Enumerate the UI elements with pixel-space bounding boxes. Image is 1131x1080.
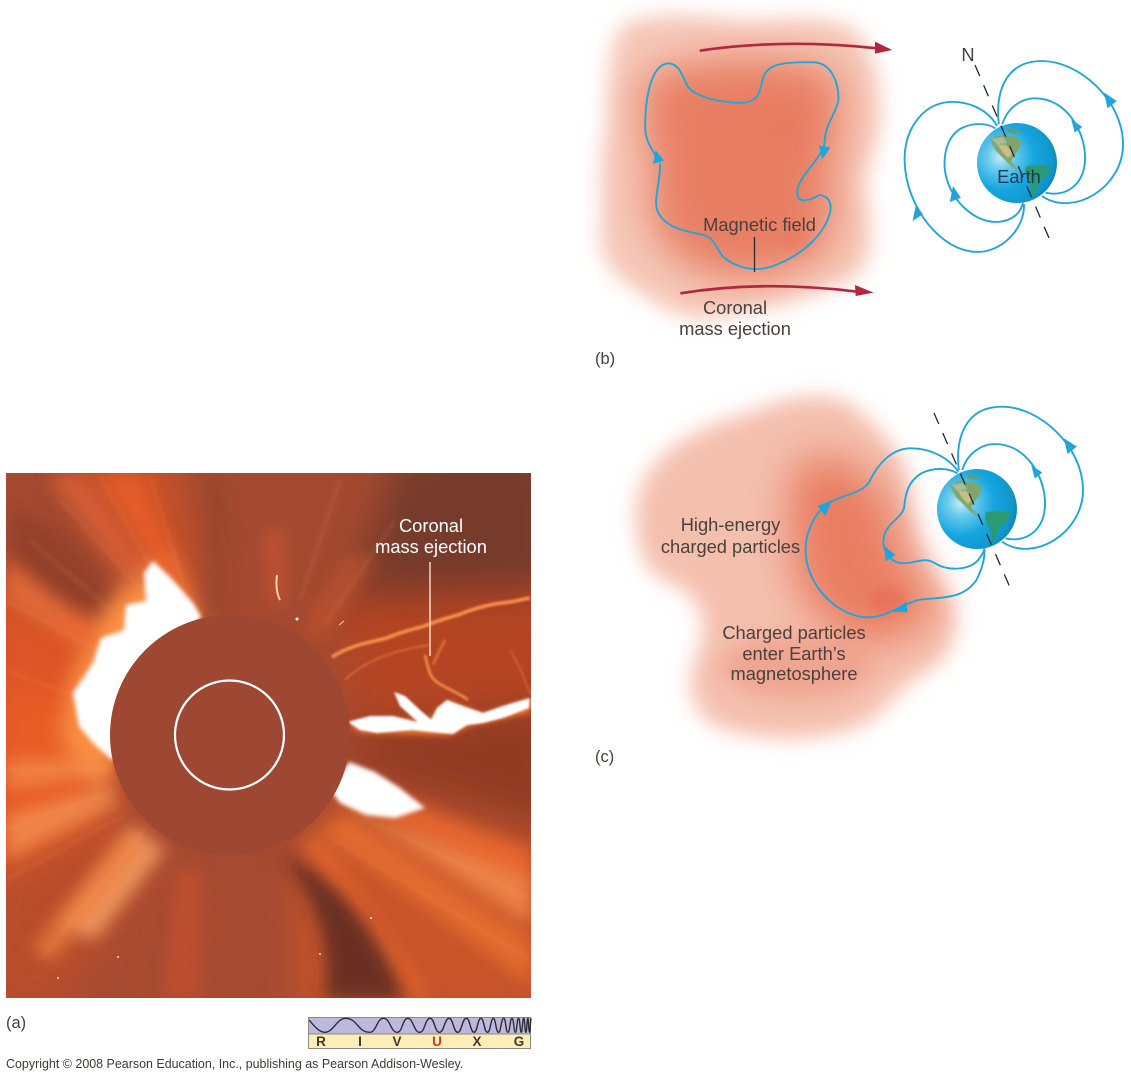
globe c — [937, 469, 1017, 549]
label: Earth: Earth — [997, 166, 1041, 187]
leader line: magnetic field — [754, 237, 756, 272]
red flow arrow, bottom — [680, 285, 874, 296]
label: charged particles enter magnetosphere: Charged particles — [722, 622, 866, 643]
label: coronal mass ejection on photo: mass ejection — [375, 536, 487, 557]
label: high-energy charged particles: charged particles — [661, 536, 800, 557]
globe b — [977, 123, 1057, 203]
label: b: (b) — [595, 350, 615, 368]
magnetic axis c — [934, 413, 1012, 592]
dark swoosh below the disc — [282, 855, 405, 1000]
field lines b — [905, 61, 1123, 252]
band letters: U — [432, 1034, 442, 1049]
bright white corona, left — [73, 561, 201, 760]
spectrum bar — [308, 1018, 531, 1049]
label: N: N — [961, 44, 975, 65]
panel c: particles enter magnetosphere — [595, 396, 1083, 766]
panel a: coronagraph photo of the Sun — [0, 450, 560, 1020]
field arrows c — [818, 438, 1077, 612]
occulting disc — [110, 615, 350, 855]
field arrows b — [913, 93, 1117, 221]
band letters: G — [514, 1034, 524, 1049]
callout line — [429, 562, 431, 656]
copyright line: Copyright © 2008 Pearson Education, Inc., publishing as Pearson Addison-Wesley. — [6, 1057, 463, 1071]
cloud c — [636, 396, 955, 738]
field lines c — [806, 407, 1083, 617]
halo around the white corona — [60, 550, 200, 790]
label: coronal mass ejection on photo: Coronal — [399, 515, 463, 536]
band letters: V — [392, 1034, 402, 1049]
CME bright streak — [348, 692, 530, 734]
label: a: (a) — [6, 1014, 26, 1032]
chirped wave — [309, 1018, 531, 1032]
label: charged particles enter magnetosphere: magnetosphere — [730, 663, 858, 684]
label: magnetic field: Magnetic field — [703, 214, 816, 235]
panel b: CME approaching Earth — [595, 16, 1123, 368]
cloud b — [600, 16, 880, 318]
band letters — [316, 1034, 524, 1049]
label: high-energy charged particles: High-energy — [681, 514, 781, 535]
CME glow — [348, 700, 530, 735]
label: coronal mass ejection: mass ejection — [679, 318, 791, 339]
band letters: I — [358, 1034, 362, 1049]
CME loop shell — [332, 598, 531, 700]
bright white corona, lower right — [330, 762, 425, 818]
band letters: R — [316, 1034, 326, 1049]
red flow arrow, top — [700, 42, 892, 54]
label: coronal mass ejection: Coronal — [703, 297, 767, 318]
magnetic field loop in the CME — [645, 62, 838, 269]
white solar ring — [175, 680, 284, 790]
label: charged particles enter magnetosphere: enter Earth’s — [742, 643, 846, 664]
band letters: X — [472, 1034, 482, 1049]
fine radial rays — [384, 523, 393, 536]
magnetic axis b — [975, 65, 1052, 245]
streamer fleck — [276, 575, 280, 600]
label: c: (c) — [595, 748, 614, 766]
